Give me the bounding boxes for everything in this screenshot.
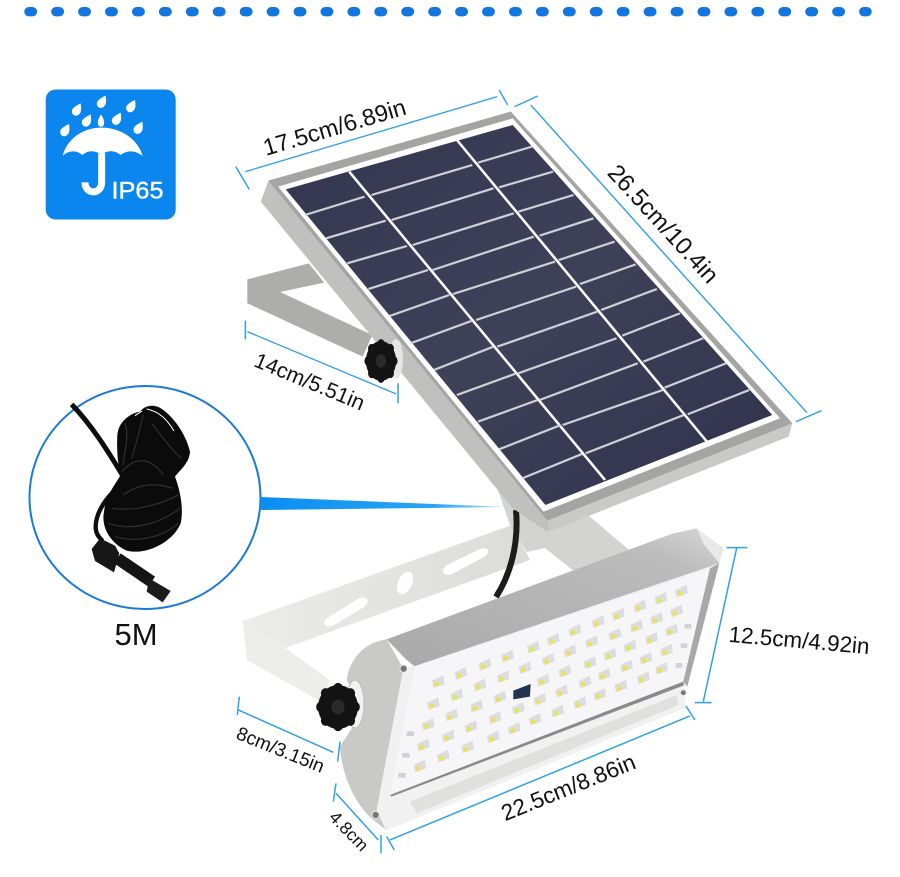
icon: panel knob xyxy=(364,339,403,383)
solar cells xyxy=(286,125,772,505)
dimension label: lamp bracket: 8cm/3.15in xyxy=(233,723,327,778)
panel frame xyxy=(261,112,792,532)
mounting bracket xyxy=(243,490,640,702)
icon: lamp knob xyxy=(316,680,364,731)
blue pointer wedge xyxy=(261,497,510,510)
label: cable length: 5M xyxy=(114,617,158,652)
dimension lines: panel xyxy=(236,90,822,422)
lamp body xyxy=(340,528,723,831)
dimension label: lamp height: 12.5cm/4.92in xyxy=(728,622,871,659)
dimension label: panel width: 17.5cm/6.89in xyxy=(260,94,409,161)
dimension lines: lamp xyxy=(237,548,747,853)
panel stand bracket xyxy=(247,263,372,357)
callout: cable detail circle xyxy=(30,386,260,609)
floodlight xyxy=(316,528,723,831)
icon: coiled black cable xyxy=(72,404,190,602)
dimension label: lamp width: 22.5cm/8.86in xyxy=(497,748,639,826)
icon: IP65 waterproof badge xyxy=(46,90,176,220)
screws xyxy=(372,665,686,819)
power cable xyxy=(496,510,517,597)
solar panel xyxy=(247,112,792,532)
icon: IP65 waterproof badge: IP65 xyxy=(112,177,164,204)
LED array xyxy=(398,585,691,778)
dimension label: lamp depth: 4.8cm xyxy=(325,807,373,855)
dimension label: panel height: 26.5cm/10.4in xyxy=(602,160,724,289)
dimension label: stand: 14cm/5.51in xyxy=(251,348,368,415)
top dotted border xyxy=(29,7,867,16)
